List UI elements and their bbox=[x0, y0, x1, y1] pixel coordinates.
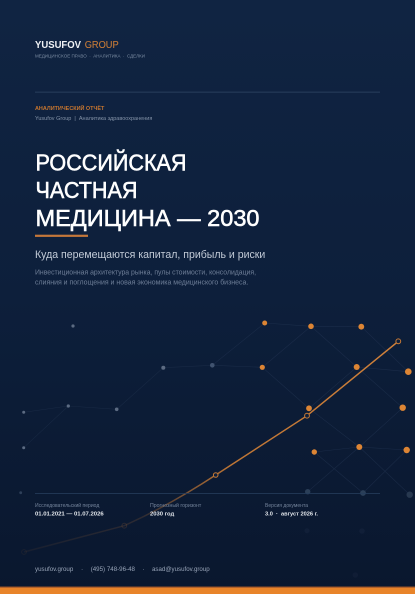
brand logo: GROUP bbox=[85, 40, 119, 51]
document version: Версия документа bbox=[265, 503, 308, 509]
description bbox=[35, 269, 256, 286]
document version bbox=[265, 503, 318, 518]
right network links bbox=[212, 323, 410, 495]
bottom accent bar bbox=[0, 587, 415, 594]
footer contacts bbox=[35, 566, 210, 573]
title: ЧАСТНАЯ bbox=[36, 177, 138, 203]
report source: Yusufov Group | Аналитика здравоохранения bbox=[35, 116, 152, 122]
title bbox=[36, 149, 260, 231]
forecast horizon: 2030 год bbox=[150, 512, 175, 518]
document version: 3.0 · август 2026 г. bbox=[265, 512, 318, 518]
brand logo: YUSUFOV bbox=[35, 40, 81, 51]
footer contacts: (495) 748-96-48 bbox=[91, 566, 135, 573]
footer contacts: · bbox=[81, 566, 83, 573]
footer contacts: yusufov.group bbox=[35, 566, 74, 573]
grey nodes bbox=[19, 324, 215, 494]
title underline bbox=[35, 235, 88, 237]
left network links bbox=[24, 365, 212, 448]
forecast horizon bbox=[150, 502, 202, 518]
brand tagline: МЕДИЦИНСКОЕ ПРАВО · АНАЛИТИКА · СДЕЛКИ bbox=[35, 54, 146, 60]
research period: 01.01.2021 — 01.07.2026 bbox=[35, 512, 104, 518]
report label: АНАЛИТИЧЕСКИЙ ОТЧЁТ bbox=[35, 104, 105, 112]
subtitle: Куда перемещаются капитал, прибыль и риски bbox=[35, 249, 265, 261]
forecast horizon: Прогнозный горизонт bbox=[150, 502, 202, 509]
title: МЕДИЦИНА — 2030 bbox=[36, 205, 260, 231]
footer contacts: · bbox=[142, 566, 145, 573]
description: слияния и поглощения и новая экономика медицинского бизнеса. bbox=[35, 278, 248, 286]
network graph bbox=[19, 320, 413, 578]
brand logo bbox=[35, 40, 119, 51]
growth trend line bbox=[24, 341, 398, 552]
title: РОССИЙСКАЯ bbox=[36, 149, 186, 176]
description: Инвестиционная архитектура рынка, пулы стоимости, консолидация, bbox=[35, 269, 256, 276]
trend markers bbox=[22, 339, 401, 554]
footer contacts: asad@yusufov.group bbox=[152, 566, 210, 573]
orange nodes bbox=[260, 320, 412, 455]
research period: Исследовательский период bbox=[35, 502, 99, 509]
research period bbox=[35, 502, 104, 518]
faded nodes bbox=[304, 489, 413, 578]
